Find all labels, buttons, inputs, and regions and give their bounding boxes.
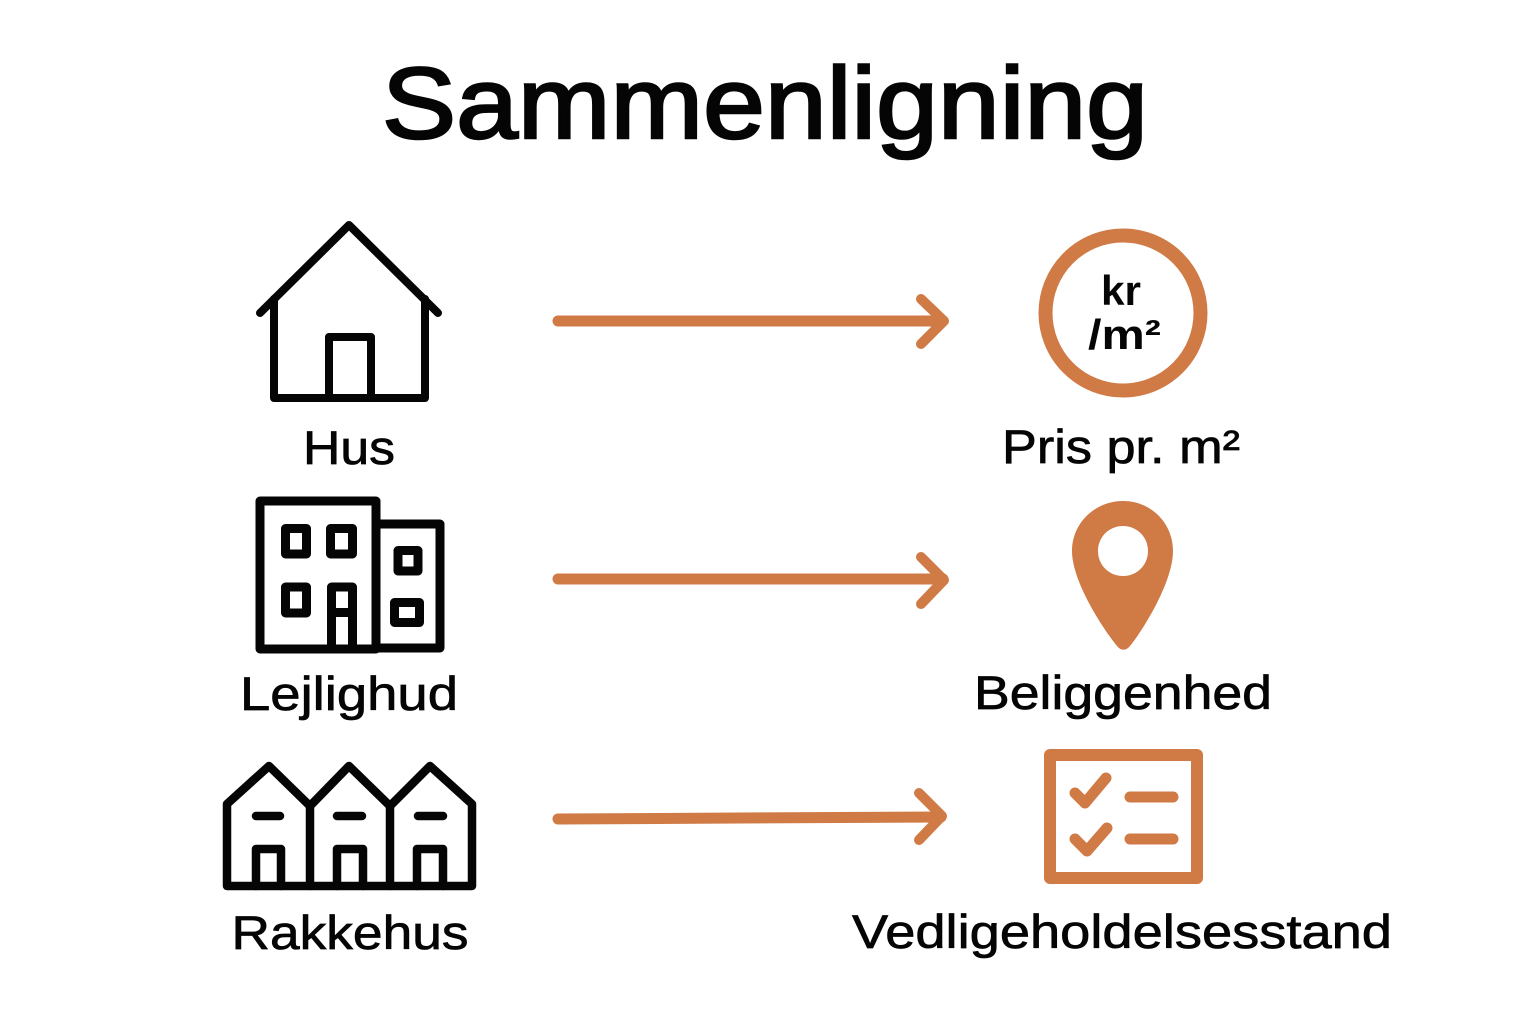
label: Hus: Hus — [303, 421, 395, 474]
label: Beliggenhed: Beliggenhed — [974, 666, 1272, 719]
arrow: row 2 — [558, 557, 944, 604]
label: Lejlighud: Lejlighud — [240, 667, 458, 720]
icon: location pin — [1072, 501, 1173, 650]
arrow: row 1 — [558, 299, 944, 344]
label: Rakkehus: Rakkehus — [232, 906, 468, 959]
icon: house — [260, 225, 438, 398]
icon: condition checklist — [1050, 755, 1197, 878]
icon: price per square metre: kr — [1101, 267, 1141, 314]
label: Vedligeholdelsesstand: Vedligeholdelsesstand — [852, 905, 1392, 958]
arrow: row 3 — [558, 793, 942, 840]
icon: price per square metre: /m² — [1088, 311, 1161, 358]
title: Sammenligning — [382, 48, 1148, 160]
icon: price per square metre — [1046, 236, 1200, 390]
icon: apartment building — [260, 501, 440, 649]
label: Pris pr. m²: Pris pr. m² — [1002, 420, 1240, 473]
icon: row houses — [227, 766, 472, 886]
